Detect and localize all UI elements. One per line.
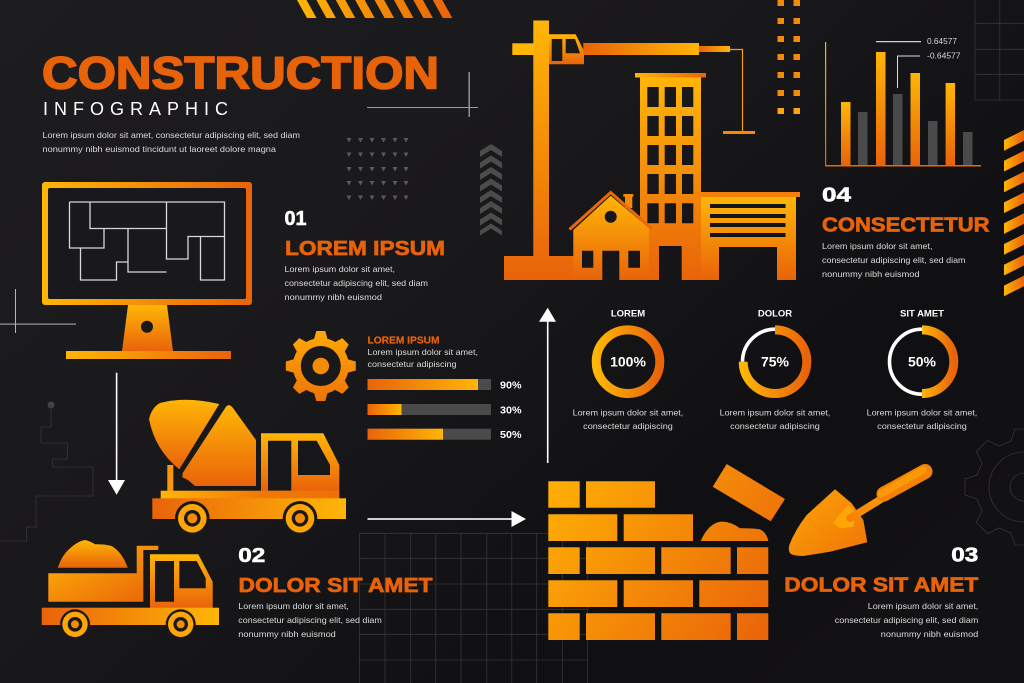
axes (825, 42, 981, 166)
mixer drum rear (149, 400, 219, 469)
trowel blade highlight (833, 505, 855, 528)
intro text (42, 130, 300, 154)
chevron pattern (480, 144, 502, 236)
body text: Lorem ipsum dolor sit amet, (868, 601, 978, 611)
heading lorem ipsum: LOREM IPSUM (285, 237, 445, 260)
crane boom tip (699, 46, 730, 52)
low block (701, 197, 796, 280)
donut text: consectetur adipiscing (583, 421, 673, 431)
monitor frame (42, 182, 252, 305)
floor plan (70, 202, 224, 280)
mixer chassis (152, 498, 346, 519)
icon: gear (286, 331, 356, 401)
body text: Lorem ipsum dolor sit amet, (822, 241, 932, 251)
chart callout 1 (876, 37, 958, 46)
section 04 (822, 184, 990, 279)
brick rows (548, 481, 768, 640)
number 03: 03 (951, 544, 978, 567)
monitor base (66, 351, 231, 359)
trowel handle (884, 472, 925, 494)
body text (238, 601, 382, 639)
dump chassis (42, 608, 219, 625)
donut label: LOREM (611, 309, 645, 320)
number 04: 04 (822, 184, 852, 207)
body text: nonummy nibh euismod (822, 269, 920, 279)
section 01 (284, 207, 445, 302)
donut white arc (890, 329, 922, 394)
hazard stripes right (1004, 130, 1024, 296)
donut text (573, 407, 683, 431)
mixer rear wheel (175, 501, 210, 536)
body text (835, 601, 979, 639)
heading: construction: CONSTRUCTION (42, 47, 439, 98)
dump rear wheel (60, 609, 90, 639)
bar 50% (368, 429, 522, 441)
bar 50%: 50% (500, 430, 522, 441)
gear body text: consectetur adipiscing (368, 359, 457, 369)
donut orange arc (743, 330, 807, 394)
body text: consectetur adipiscing elit, sed diam (238, 615, 382, 625)
body text: Lorem ipsum dolor sit amet, (238, 601, 349, 611)
bar chart (825, 37, 981, 166)
dump body (48, 546, 158, 602)
mixer deck (161, 491, 339, 498)
icon: crane (504, 20, 755, 280)
crane cab (549, 34, 584, 64)
mixer support (167, 465, 173, 492)
body text (822, 241, 966, 279)
body text: consectetur adipiscing elit, sed diam (284, 278, 428, 288)
crane counter arm (512, 43, 534, 55)
house roof outline (570, 192, 652, 230)
section 03 (784, 544, 979, 639)
arrow down (108, 373, 125, 495)
hazard stripes top (297, 0, 452, 18)
intro text: Lorem ipsum dolor sit amet, consectetur adipiscing elit, sed diam (42, 130, 300, 140)
triangle dot pattern (346, 138, 408, 200)
donut text: consectetur adipiscing (877, 421, 967, 431)
donut orange arc (922, 330, 954, 394)
chimney (623, 194, 633, 208)
bar 30% (368, 404, 522, 416)
low block roof (695, 192, 800, 197)
crane mast and base (504, 20, 575, 280)
donut ring (596, 330, 660, 394)
dump load (58, 540, 128, 568)
crane cable (730, 50, 742, 132)
background grid: bottom (359, 533, 588, 683)
chart callout 2: -0.64577 (927, 52, 961, 60)
trowel handle highlight (881, 470, 923, 494)
donut white arc (742, 329, 775, 362)
trowel blade (789, 489, 867, 556)
crane boom (583, 43, 699, 55)
donut stat: dolor 75% (720, 309, 830, 431)
body text: consectetur adipiscing elit, sed diam (822, 255, 966, 265)
bar 90%: 90% (500, 380, 522, 392)
icon: cement mixer truck (149, 400, 346, 536)
bar 90% (368, 379, 522, 392)
donut value: 100% (610, 354, 646, 370)
icon: house (570, 192, 652, 280)
subheading: infographic: INFOGRAPHIC (43, 99, 228, 119)
icon: dump truck (42, 540, 219, 639)
gear body text: Lorem ipsum dolor sit amet, (368, 347, 478, 357)
gear body text (368, 347, 478, 369)
mortar pile (701, 522, 768, 541)
background grid: top right (975, 0, 1024, 100)
arrow up (539, 308, 556, 463)
progress bars (368, 379, 522, 441)
bar 30%: 30% (500, 406, 522, 416)
donut text: consectetur adipiscing (730, 421, 820, 431)
gear heading: LOREM IPSUM (368, 336, 440, 346)
mixer drum front (182, 405, 256, 486)
mixer cab (261, 433, 339, 491)
body text: Lorem ipsum dolor sit amet, (284, 264, 395, 274)
decorative orange dots (778, 0, 800, 114)
chart callout 2 (898, 52, 961, 88)
loose brick (713, 464, 785, 521)
monitor stand (122, 305, 173, 351)
heading dolor sit amet: DOLOR SIT AMET (238, 574, 433, 597)
title (42, 47, 439, 119)
donut stat: lorem 100% (573, 309, 683, 431)
body text: consectetur adipiscing elit, sed diam (835, 615, 978, 625)
house body (573, 196, 649, 280)
mixer front wheel (283, 501, 317, 536)
trowel neck (850, 498, 882, 518)
donut text (720, 407, 830, 431)
tower body (640, 77, 701, 280)
chart callout 1: 0.64577 (927, 37, 958, 46)
crane hook bar (723, 131, 755, 134)
monitor screen (48, 188, 246, 299)
heading dolor sit amet: DOLOR SIT AMET (784, 574, 979, 597)
donut text: Lorem ipsum dolor sit amet, (720, 407, 830, 417)
body text: nonummy nibh euismod (881, 629, 979, 639)
orange bars (841, 52, 955, 165)
dump front wheel (166, 609, 196, 639)
icon: computer monitor with floor plan (42, 182, 252, 359)
dump cab (150, 554, 213, 608)
gray bars (858, 94, 972, 165)
donut text: Lorem ipsum dolor sit amet, (573, 407, 683, 417)
body text: nonummy nibh euismod (284, 292, 382, 302)
gear text block (368, 336, 478, 369)
donut label: SIT AMET (900, 309, 944, 320)
body text (284, 264, 428, 302)
icon: brick wall (548, 464, 785, 640)
background circuit line (0, 402, 93, 541)
donut text: Lorem ipsum dolor sit amet, (867, 407, 977, 417)
donut label: DOLOR (758, 309, 792, 320)
crosshair top (367, 72, 478, 117)
crosshair left (0, 289, 76, 333)
donut text (867, 407, 977, 431)
heading consectetur: CONSECTETUR (822, 214, 990, 237)
arrow right (368, 511, 526, 527)
number 02: 02 (238, 544, 265, 567)
background gear outline (965, 429, 1024, 545)
intro text: nonummy nibh euismod tincidunt ut laoreet dolore magna (42, 144, 276, 154)
number 01: 01 (284, 207, 306, 230)
section 02 (238, 544, 433, 639)
donut stat: sit amet 50% (867, 309, 977, 431)
donut value: 75% (761, 354, 790, 370)
body text: nonummy nibh euismod (238, 629, 336, 639)
icon: tower building (635, 73, 800, 280)
stand hole (141, 321, 153, 333)
tower roof (635, 73, 706, 78)
icon: trowel (789, 470, 925, 556)
donut value: 50% (908, 354, 937, 370)
